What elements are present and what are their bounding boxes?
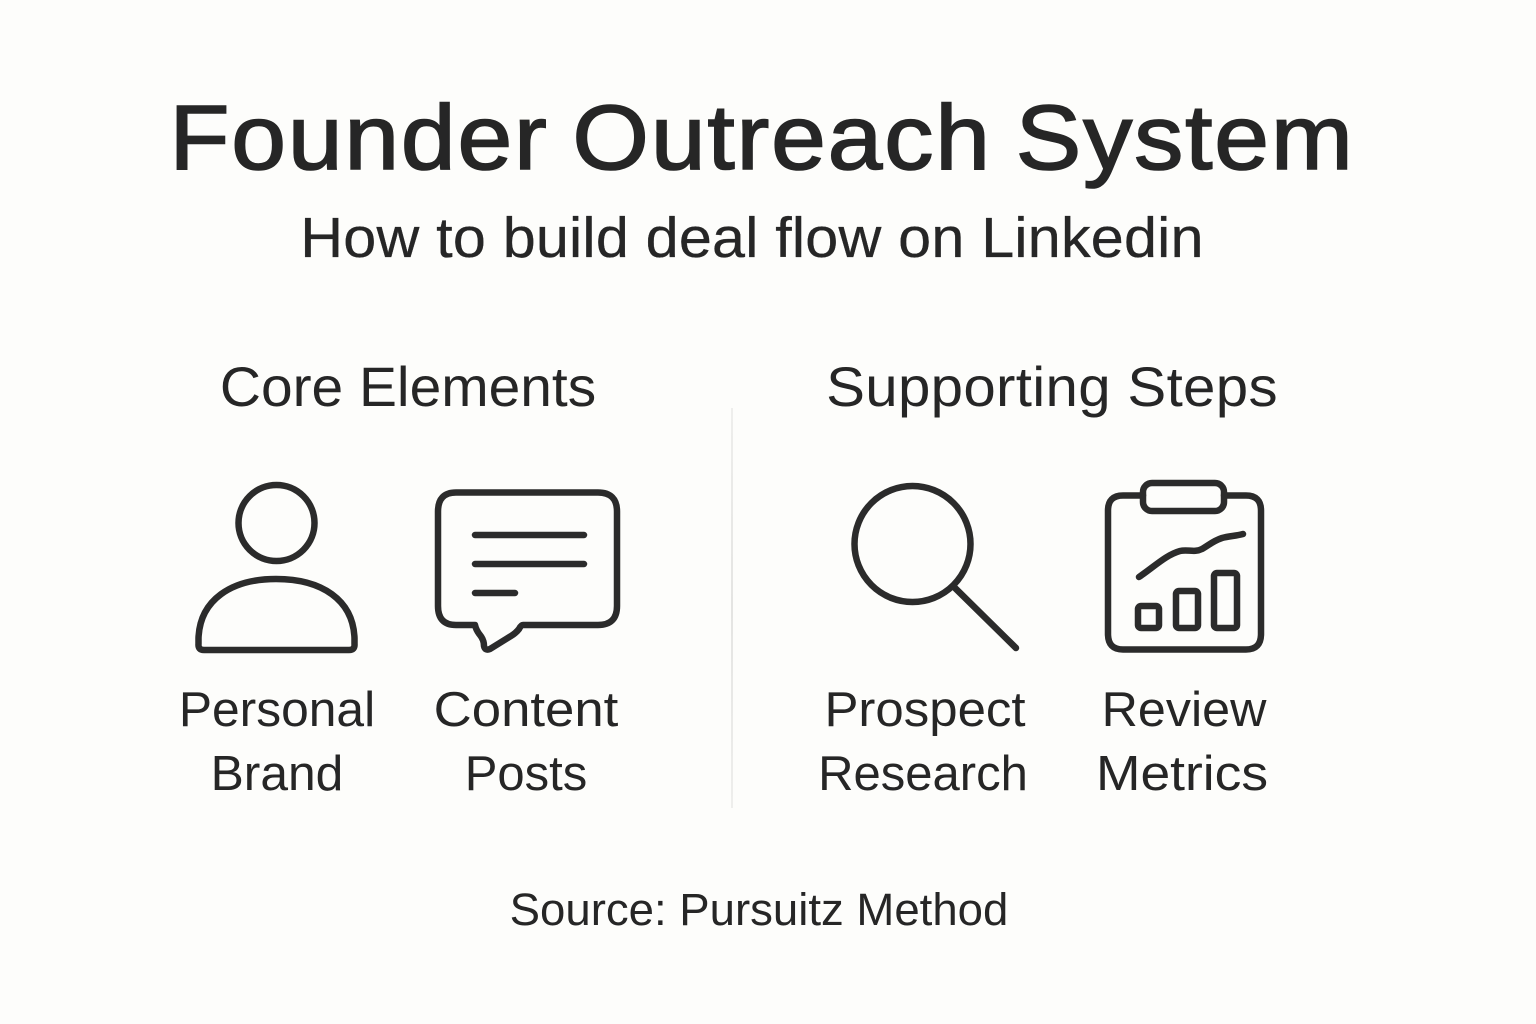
source note: Source: Pursuitz Method: [510, 884, 1008, 935]
label: content posts: Posts: [465, 747, 587, 801]
label: content posts: [433, 683, 618, 801]
label: review metrics: Metrics: [1096, 747, 1268, 801]
subtitle: How to build deal flow on Linkedin: [300, 206, 1203, 270]
label: prospect research: [818, 683, 1028, 801]
label: review metrics: Review: [1102, 683, 1266, 737]
label: prospect research: Prospect: [824, 683, 1026, 737]
heading: core elements: Core Elements: [220, 355, 596, 418]
label: personal brand: [178, 683, 375, 801]
label: prospect research: Research: [818, 747, 1028, 801]
title: Founder Outreach System: [169, 87, 1355, 189]
central divider: [731, 408, 733, 808]
label: personal brand: Personal: [178, 683, 375, 737]
label: review metrics: [1096, 683, 1268, 801]
label: personal brand: Brand: [211, 747, 343, 801]
heading: supporting steps: Supporting Steps: [826, 355, 1278, 418]
label: content posts: Content: [433, 683, 618, 737]
